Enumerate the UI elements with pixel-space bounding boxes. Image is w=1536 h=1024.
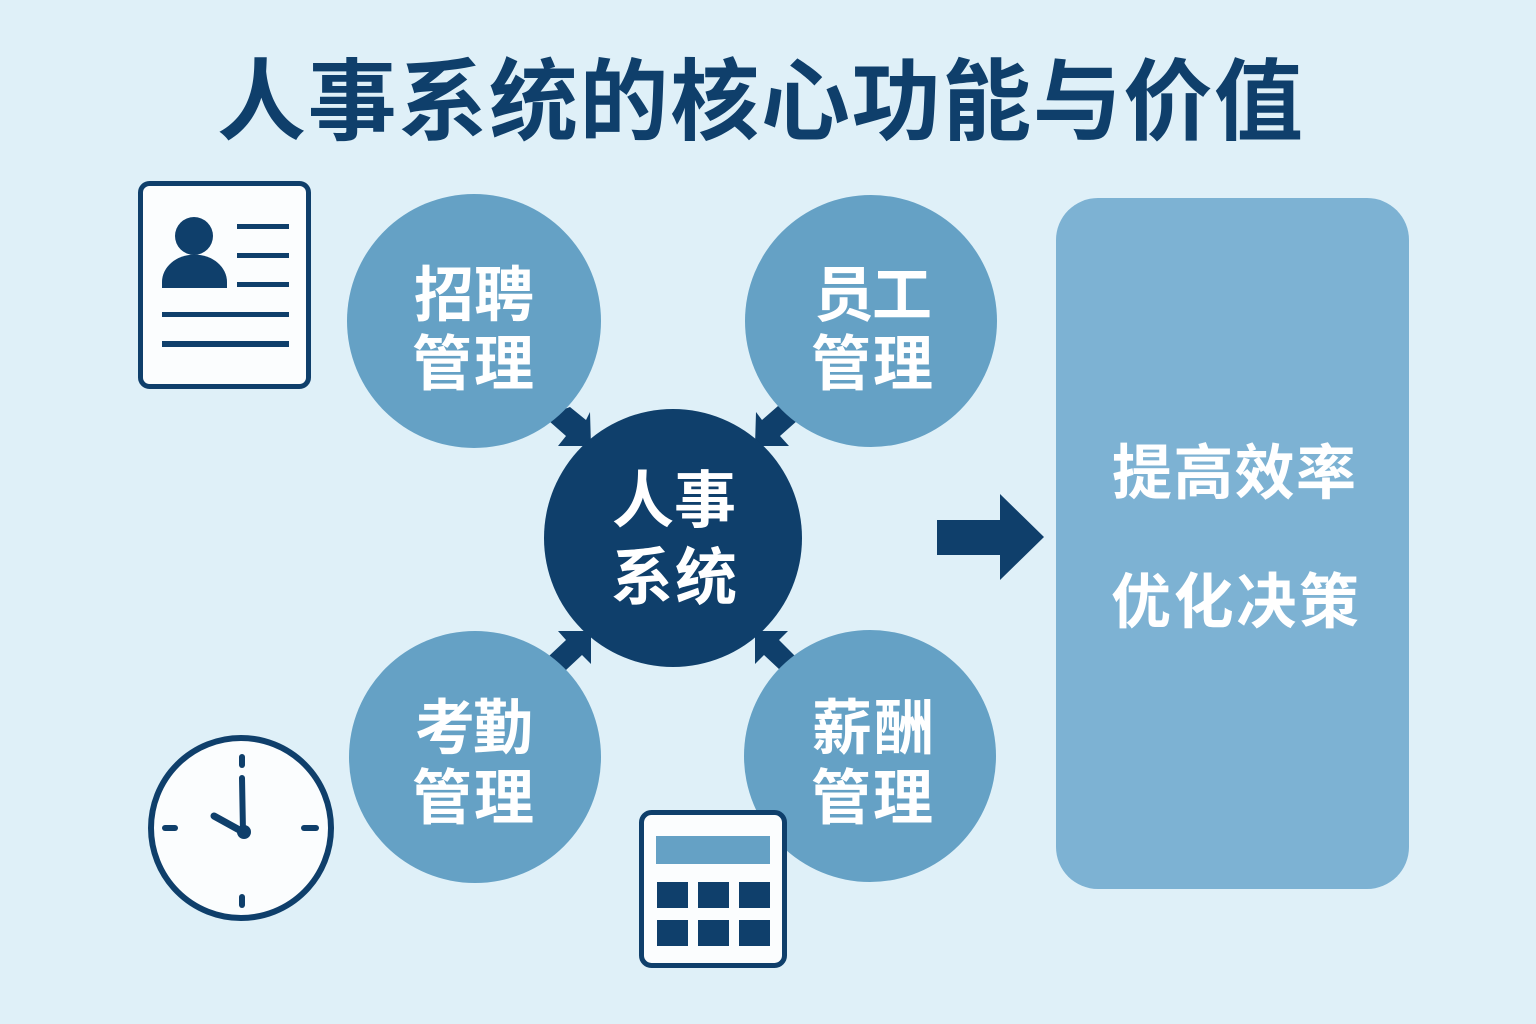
- panel: employee circle: 员工: [814, 262, 932, 329]
- panel: employee circle: [745, 195, 997, 447]
- icon: calculator: [642, 812, 784, 966]
- panel: attendance circle: 考勤: [415, 695, 533, 762]
- panel: central HR system circle: [544, 409, 802, 667]
- panel: value: [1056, 198, 1409, 889]
- panel: value: 提高效率: [1112, 440, 1356, 507]
- panel: payroll circle: 薪酬: [812, 695, 934, 762]
- icon: clock: [151, 738, 331, 918]
- arrows: modules to center: [549, 406, 798, 670]
- panel: central HR system circle: 人事: [612, 467, 736, 536]
- panel: employee circle: 管理: [811, 331, 933, 398]
- panel: attendance circle: [349, 631, 601, 883]
- title: 人事系统的核心功能与价值: [217, 52, 1303, 152]
- panel: value: 优化决策: [1111, 569, 1359, 636]
- panel: payroll circle: [744, 630, 996, 882]
- panel: recruitment circle: 管理: [412, 331, 534, 398]
- panel: central HR system circle: 系统: [611, 544, 737, 613]
- arrow: to value panel: [937, 494, 1044, 580]
- panel: payroll circle: 管理: [811, 765, 933, 832]
- panel: recruitment circle: 招聘: [414, 262, 534, 329]
- icon: resume document: [140, 184, 308, 386]
- panel: recruitment circle: [347, 194, 601, 448]
- panel: attendance circle: 管理: [412, 765, 534, 832]
